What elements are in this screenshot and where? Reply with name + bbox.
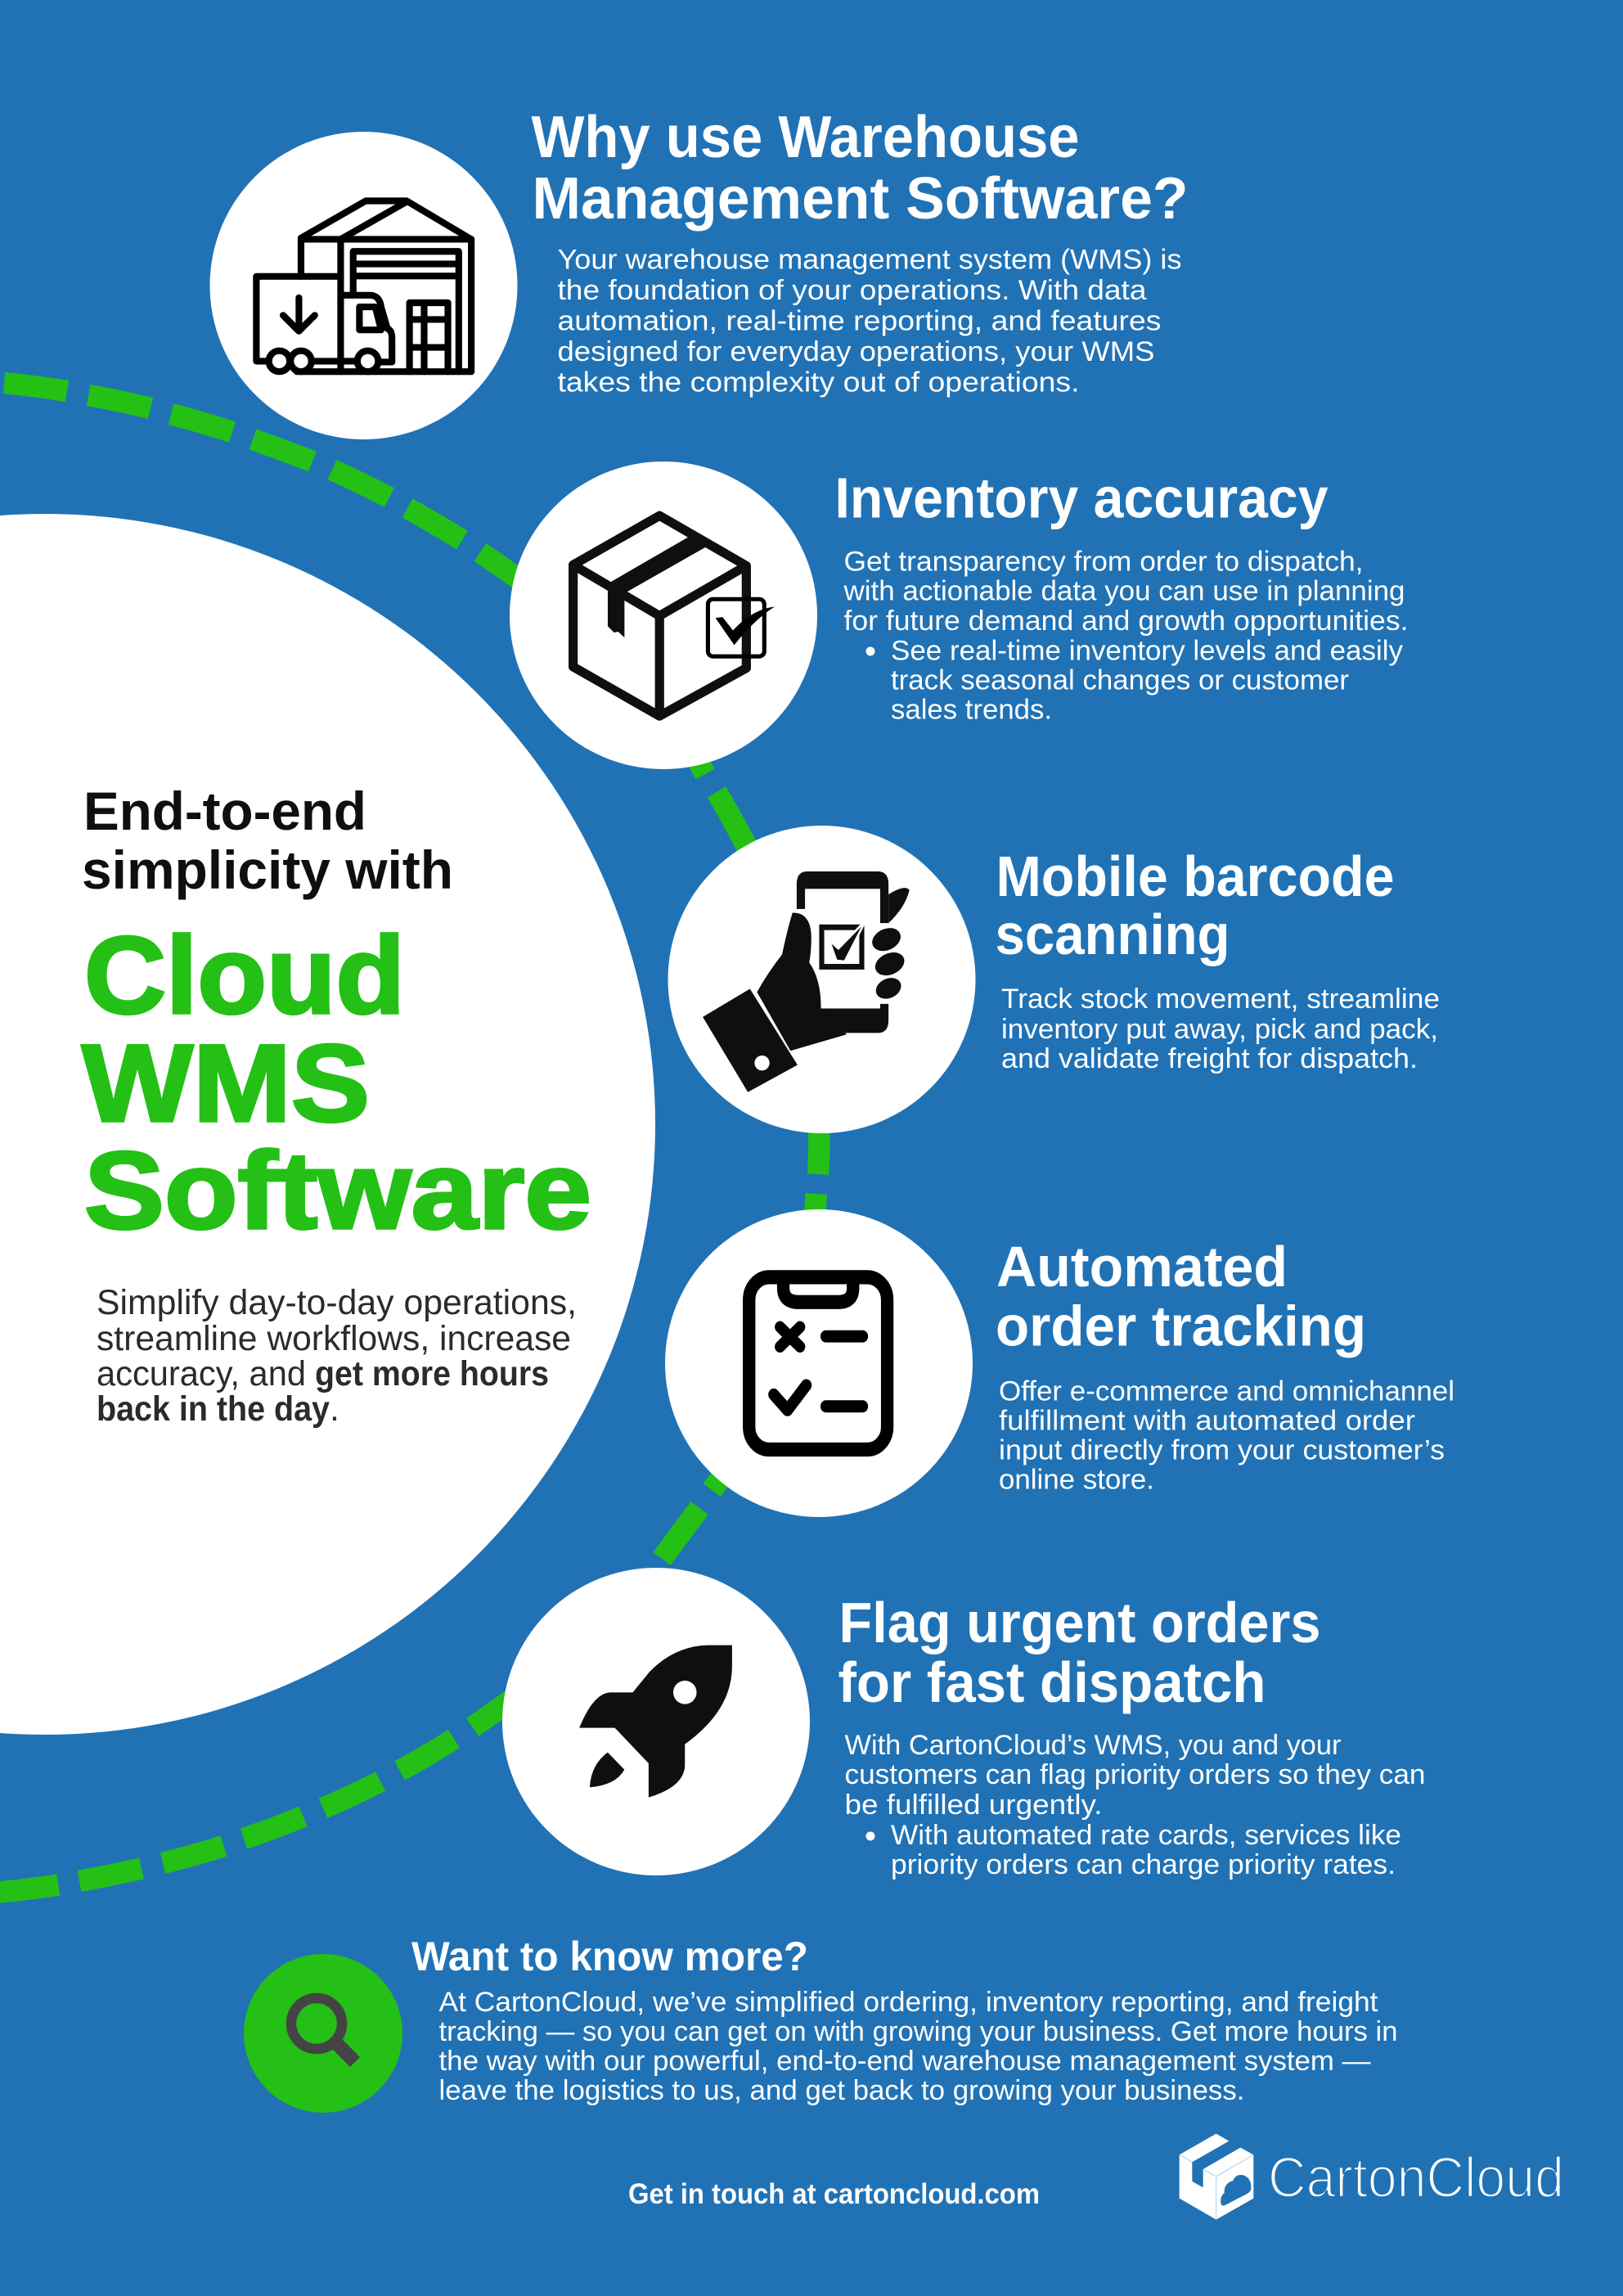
body text: With automated rate cards, services like bbox=[891, 1820, 1401, 1851]
body text: for future demand and growth opportunities. bbox=[844, 606, 1409, 637]
heading bbox=[532, 105, 1188, 232]
heading: order tracking bbox=[996, 1294, 1366, 1358]
heading: Want to know more? bbox=[411, 1934, 808, 1979]
body text: be fulfilled urgently. bbox=[844, 1790, 1103, 1821]
panel: automated order tracking bbox=[665, 1209, 1454, 1517]
body text: input directly from your customer’s bbox=[999, 1435, 1445, 1466]
panel: inventory accuracy bbox=[510, 461, 1409, 769]
body text: Get transparency from order to dispatch, bbox=[844, 547, 1363, 578]
call to action: Get in touch at cartoncloud.com bbox=[628, 2178, 1040, 2210]
intro paragraph: get more hours bbox=[315, 1354, 549, 1393]
logo: CartonCloud bbox=[1180, 2134, 1564, 2220]
icon: magnifier in green circle bbox=[244, 1954, 402, 2113]
body text: leave the logistics to us, and get back to growing your business. bbox=[438, 2075, 1245, 2106]
body text: takes the complexity out of operations. bbox=[558, 367, 1080, 398]
body text: online store. bbox=[999, 1465, 1154, 1496]
body text: the way with our powerful, end-to-end warehouse management system — bbox=[438, 2046, 1371, 2077]
heading: Automated bbox=[996, 1235, 1288, 1299]
body text bbox=[999, 1376, 1454, 1496]
main title: Cloud WMS Software: Cloud bbox=[84, 915, 405, 1037]
logo box mark bbox=[1180, 2134, 1253, 2220]
body text: designed for everyday operations, your WMS bbox=[558, 336, 1155, 367]
intro heading bbox=[82, 781, 453, 900]
body text bbox=[843, 547, 1409, 725]
body text: See real-time inventory levels and easily bbox=[891, 635, 1403, 666]
panel: why use WMS bbox=[209, 105, 1188, 439]
body text: customers can flag priority orders so they can bbox=[844, 1759, 1425, 1790]
body text: and validate freight for dispatch. bbox=[1001, 1043, 1418, 1074]
body text: fulfillment with automated order bbox=[999, 1406, 1415, 1437]
main title: Cloud WMS Software bbox=[82, 915, 591, 1252]
dashed green path bbox=[0, 383, 819, 1893]
body text bbox=[844, 1730, 1425, 1880]
body text bbox=[438, 1987, 1397, 2106]
circle with box icon bbox=[510, 461, 817, 769]
heading: for fast dispatch bbox=[838, 1650, 1266, 1714]
circle with clipboard icon bbox=[665, 1209, 973, 1517]
body text: tracking — so you can get on with growing your business. Get more hours in bbox=[438, 2016, 1397, 2047]
heading: Why use Warehouse bbox=[532, 105, 1080, 170]
body text: Offer e-commerce and omnichannel bbox=[999, 1376, 1454, 1407]
circle with phone in hand icon bbox=[668, 826, 975, 1133]
body text: automation, real-time reporting, and features bbox=[558, 306, 1162, 337]
body text: Your warehouse management system (WMS) is bbox=[558, 244, 1181, 275]
intro heading: simplicity with bbox=[82, 840, 453, 900]
intro paragraph: Simplify day-to-day operations, bbox=[97, 1283, 577, 1322]
body text: track seasonal changes or customer bbox=[891, 664, 1349, 696]
main title: Cloud WMS Software: WMS bbox=[82, 1023, 370, 1145]
large white circle panel bbox=[0, 514, 655, 1735]
heading bbox=[838, 1591, 1320, 1714]
body text: with actionable data you can use in planning bbox=[843, 576, 1405, 607]
heading bbox=[995, 844, 1394, 966]
main title: Cloud WMS Software: Software bbox=[84, 1130, 591, 1252]
body text: the foundation of your operations. With data bbox=[558, 275, 1147, 306]
body text: inventory put away, pick and pack, bbox=[1001, 1014, 1438, 1045]
headline panel bbox=[82, 781, 591, 1429]
circle with warehouse and truck icon bbox=[209, 132, 517, 439]
circle with rocket icon bbox=[502, 1568, 810, 1875]
body text: priority orders can charge priority rates. bbox=[891, 1849, 1396, 1880]
heading: Inventory accuracy bbox=[834, 466, 1329, 530]
logo wordmark: CartonCloud bbox=[1268, 2145, 1564, 2209]
heading: Mobile barcode bbox=[996, 844, 1394, 908]
body text: At CartonCloud, we’ve simplified ordering, inventory reporting, and freight bbox=[438, 1987, 1378, 2018]
intro paragraph: accuracy, and bbox=[97, 1354, 306, 1393]
intro paragraph: streamline workflows, increase bbox=[97, 1319, 571, 1358]
body text: Track stock movement, streamline bbox=[1001, 984, 1440, 1015]
body text bbox=[1001, 984, 1440, 1074]
heading bbox=[996, 1235, 1366, 1358]
heading: Management Software? bbox=[532, 166, 1188, 232]
body text: sales trends. bbox=[891, 694, 1052, 725]
heading: scanning bbox=[995, 903, 1230, 966]
intro paragraph bbox=[97, 1283, 577, 1429]
body text: With CartonCloud’s WMS, you and your bbox=[844, 1730, 1342, 1761]
intro heading: End-to-end bbox=[83, 781, 366, 841]
panel: mobile barcode scanning bbox=[668, 826, 1440, 1133]
body text bbox=[558, 244, 1181, 398]
intro paragraph: back in the day bbox=[97, 1389, 330, 1429]
heading: Flag urgent orders bbox=[839, 1591, 1320, 1654]
panel: want to know more bbox=[244, 1934, 1397, 2113]
intro paragraph: . bbox=[330, 1389, 339, 1429]
panel: flag urgent orders bbox=[502, 1568, 1425, 1880]
